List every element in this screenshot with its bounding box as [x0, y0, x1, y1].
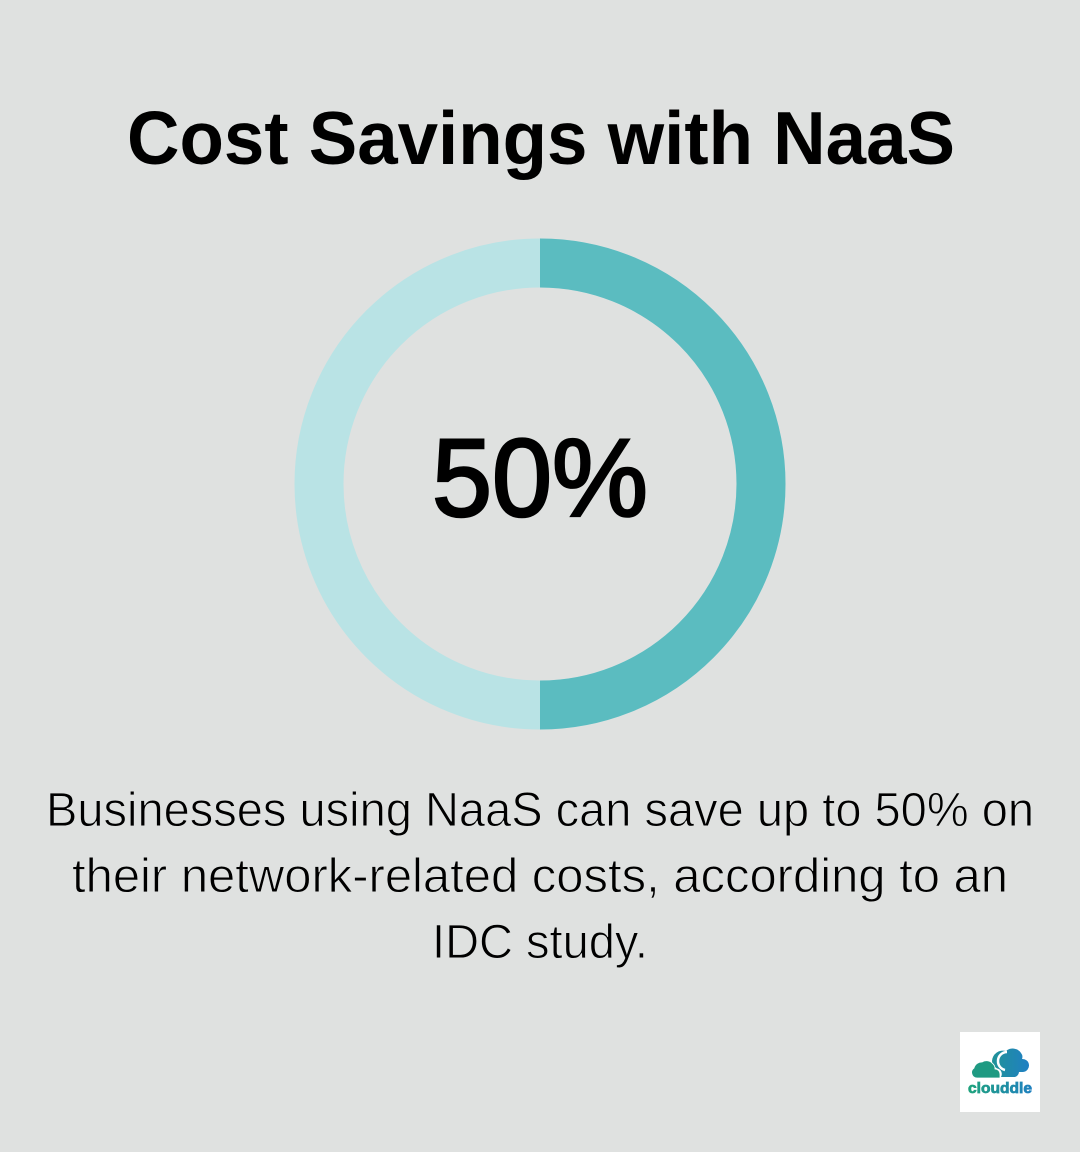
logo: clouddle [960, 1032, 1040, 1112]
description text: Businesses using NaaS can save up to 50% on [46, 784, 1034, 837]
icon: blue cloud [992, 1048, 1029, 1077]
donut chart: 50% [319, 263, 761, 705]
description text [46, 784, 1034, 969]
icon: white crescent [998, 1052, 1007, 1070]
donut value arc [540, 263, 761, 705]
donut value label: 50% [432, 417, 648, 540]
donut track [319, 263, 761, 705]
icon: green cloud [972, 1061, 1000, 1078]
logo wordmark: clouddle [968, 1081, 1032, 1097]
description text: IDC study. [432, 916, 648, 969]
logo background [960, 1032, 1040, 1112]
description text: their network-related costs, according to an [72, 850, 1008, 903]
title: Cost Savings with NaaS [127, 96, 955, 180]
